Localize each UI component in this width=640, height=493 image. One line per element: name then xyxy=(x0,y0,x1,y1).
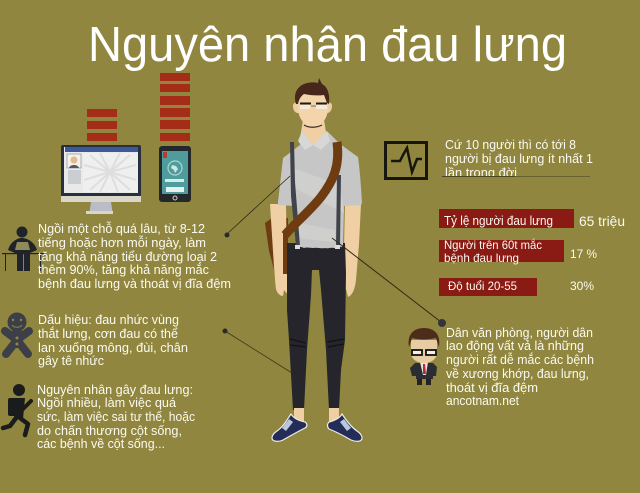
trousers xyxy=(287,243,346,410)
text: sitting too long: thêm 90%, tăng khả năng mắc xyxy=(38,262,209,277)
right arm and hand xyxy=(340,204,361,297)
stat: over 60: bệnh đau lưng xyxy=(444,251,519,265)
callout line: upper left xyxy=(224,176,290,238)
mouth and chin xyxy=(304,125,322,127)
callout line: lower left xyxy=(222,328,292,373)
hair xyxy=(295,78,329,104)
left arm and hand xyxy=(270,204,292,296)
text: symptoms: thắt lưng, cơn đau có thể xyxy=(38,326,178,341)
text: office workers at risk: người rất dễ mắc các bệnh xyxy=(446,352,594,367)
title: Nguyên nhân đau lưng xyxy=(88,18,567,72)
text: symptoms: lan xuống mông, đùi, chân xyxy=(38,340,188,355)
text: 8 of 10 people xyxy=(440,137,595,184)
shoulder strap xyxy=(285,142,338,235)
left laces xyxy=(282,419,293,431)
collar xyxy=(298,131,330,150)
text: office workers at risk: Dân văn phòng, người dân xyxy=(446,325,593,340)
stat: affected people: Tỷ lệ người đau lưng xyxy=(444,213,553,228)
bag xyxy=(265,218,288,273)
text: symptoms xyxy=(38,312,188,368)
text: symptoms: Dấu hiệu: đau nhức vùng xyxy=(38,312,179,327)
text: sitting too long: tiếng hoặc hơn mỗi ngày, làm xyxy=(38,235,206,250)
text: causes: Nguyên nhân gây đau lưng: xyxy=(37,382,193,397)
text: 8 of 10 people: Cứ 10 người thì có tới 8 xyxy=(445,137,576,152)
text: office workers at risk: lao động vất vả là những xyxy=(446,338,584,353)
neck xyxy=(300,120,327,148)
text: sitting too long: Ngồi một chỗ quá lâu, từ 8-12 xyxy=(38,221,205,236)
text: 8 of 10 people: lần trong đời xyxy=(445,165,517,180)
right ankle xyxy=(329,408,339,422)
icon: heartbeat monitor xyxy=(386,142,426,178)
text: office workers at risk xyxy=(446,325,594,408)
text: sitting too long: tăng khả năng tiểu đường loại 2 xyxy=(38,249,217,264)
stat: affected people xyxy=(439,209,625,229)
text: office workers at risk: ancotnam.net xyxy=(446,393,519,408)
shirt highlights xyxy=(290,167,344,242)
left ankle xyxy=(294,408,304,422)
text: office workers at risk: thoát vị đĩa đệm xyxy=(446,380,538,395)
stat: affected people: 65 triệu xyxy=(579,214,625,229)
right shoe xyxy=(328,414,362,441)
stat: over 60: 17 % xyxy=(570,247,597,261)
text: symptoms: gây tê nhức xyxy=(38,353,104,368)
glasses and eyes xyxy=(300,104,327,109)
suspender clips xyxy=(295,245,340,249)
stat: over 60 xyxy=(439,237,597,265)
icon: person reading at desk xyxy=(2,226,44,271)
text: causes: do chấn thương cột sống, xyxy=(37,423,182,438)
text: sitting too long xyxy=(38,221,231,291)
text: causes: Ngồi nhiều, làm việc quá xyxy=(37,395,177,410)
icon: smartphone xyxy=(159,146,191,202)
stat: age 20-55: 30% xyxy=(570,279,594,293)
face xyxy=(298,92,328,127)
icon: gingerbread figure xyxy=(5,312,29,354)
shirt xyxy=(278,131,362,248)
text: causes: các bệnh về cột sống... xyxy=(37,436,165,451)
icon: desktop monitor xyxy=(61,145,141,214)
stat: age 20-55: Độ tuổi 20-55 xyxy=(448,279,517,293)
bag strap xyxy=(283,232,288,274)
icon: running person xyxy=(3,384,31,435)
icon: cartoon office worker xyxy=(409,328,439,385)
text: causes: sức, làm việc sai tư thế, hoặc xyxy=(37,409,195,424)
stat: over 60: Người trên 60t mắc xyxy=(444,237,542,252)
illustration: standing man xyxy=(265,78,362,441)
right laces xyxy=(340,419,351,431)
knee folds xyxy=(290,339,344,347)
text: causes xyxy=(37,382,195,451)
suspenders xyxy=(290,142,300,246)
bricks above monitor xyxy=(87,109,117,141)
ears xyxy=(293,103,332,113)
left shoe xyxy=(272,414,307,441)
text: office workers at risk: về xương khớp, đau lưng, xyxy=(446,366,589,381)
stat: age 20-55 xyxy=(439,278,594,296)
text: sitting too long: bệnh đau lưng và thoát vị đĩa đệm xyxy=(38,276,231,291)
bricks above phone xyxy=(160,73,190,141)
callout line: lower right xyxy=(332,238,446,327)
text: 8 of 10 people: người bị đau lưng ít nhất 1 xyxy=(445,151,593,166)
